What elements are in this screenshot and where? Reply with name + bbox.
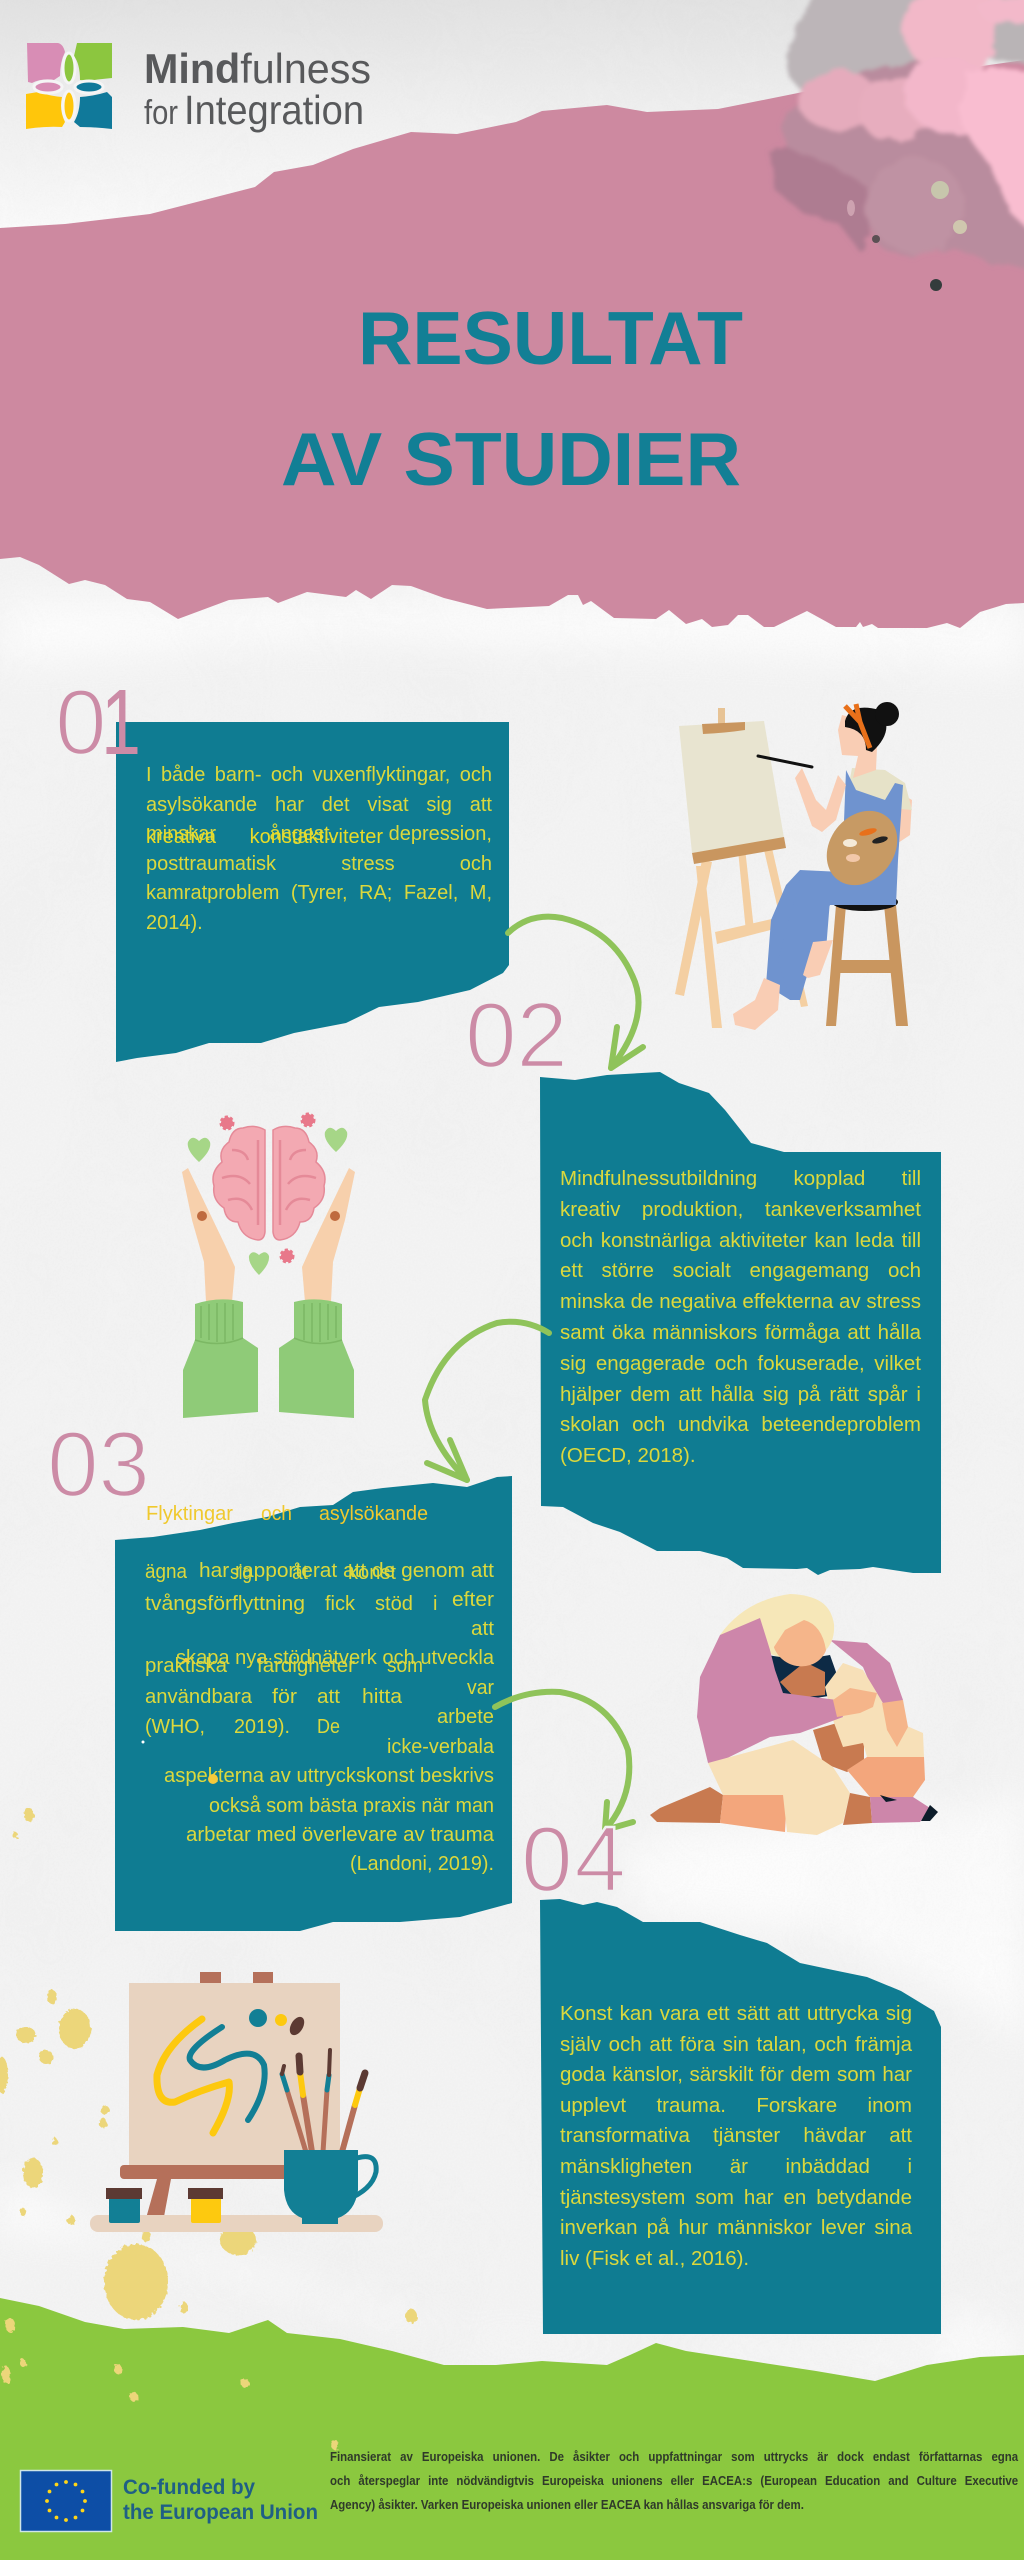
yellow jar bbox=[188, 2188, 223, 2223]
panel 03 bbox=[115, 1476, 512, 1931]
illustration: two people hugging bbox=[650, 1594, 938, 1835]
text block: panel 01 overlapping line: kreativa konstaktiviteter bbox=[146, 826, 383, 848]
child's dark hair bbox=[767, 1655, 836, 1702]
text block: panel 03 overlapped text: sig bbox=[230, 1562, 252, 1584]
base board bbox=[90, 2215, 383, 2232]
panel 02 bbox=[540, 1072, 941, 1575]
adult hands bbox=[833, 1688, 908, 1747]
text block: panel 03 overlapped text: som bbox=[387, 1655, 423, 1677]
text block: panel 03 overlapped text: var bbox=[467, 1677, 494, 1699]
hearts bbox=[188, 1128, 347, 1275]
text block: panel 01 bbox=[146, 764, 492, 934]
text block: panel 04 bbox=[560, 2002, 912, 2270]
logo bbox=[26, 43, 371, 133]
brain right lobe bbox=[273, 1126, 325, 1240]
head and neck bbox=[838, 715, 878, 778]
child's lower leg bbox=[847, 1757, 925, 1797]
number 01: 0 bbox=[55, 670, 107, 774]
text block: panel 03 overlapped text: De bbox=[317, 1716, 340, 1738]
teal paint stroke bbox=[190, 2027, 265, 2120]
text block: panel 04: upplevt trauma. Forskare inom bbox=[560, 2094, 912, 2117]
brain left lobe bbox=[213, 1126, 265, 1240]
text block: panel 03 overlapped text: 2019). bbox=[234, 1716, 290, 1738]
blond hair back bbox=[720, 1594, 834, 1665]
canvas bbox=[129, 1983, 340, 2165]
bandana bbox=[845, 704, 870, 748]
text block: panel 04: transformativa tjänster hävdar att bbox=[560, 2124, 912, 2147]
text block: funding disclaimer: Finansierat av Europeiska unionen. De åsikter och uppfattningar som uttrycks är dock endast författarnas egna bbox=[330, 2449, 1018, 2464]
left hand and sleeve bbox=[182, 1168, 258, 1418]
text block: panel 04: liv (Fisk et al., 2016). bbox=[560, 2247, 749, 2270]
black shoe tips bbox=[880, 1795, 938, 1821]
panel 04 bbox=[540, 1899, 941, 2334]
text block: funding disclaimer: Agency) åsikter. Varken Europeiska unionen eller EACEA kan hållas ansvariga för dem. bbox=[330, 2497, 804, 2512]
teal jar bbox=[106, 2188, 142, 2223]
text block: panel 02: och konstnärliga aktiviteter kan leda till bbox=[560, 1229, 921, 1252]
text block: panel 03 overlapped text: fick bbox=[325, 1593, 356, 1615]
text block: panel 03 overlapped text: asylsökande bbox=[319, 1503, 428, 1525]
text block: panel 01: posttraumatisk stress och bbox=[146, 852, 492, 874]
text block: panel 01: kamratproblem (Tyrer, RA; Fazel, M, bbox=[146, 882, 492, 904]
number 03: 03 bbox=[47, 1412, 150, 1516]
text block: panel 02: kreativ produktion, tankeverksamhet bbox=[560, 1198, 921, 1221]
logo: for bbox=[144, 94, 178, 132]
far arm bbox=[830, 1640, 903, 1707]
text block: panel 02 bbox=[560, 1167, 922, 1467]
arrow 02 to 03 bbox=[425, 1322, 549, 1480]
text block: panel 03 overlapped text: ägna bbox=[145, 1561, 188, 1583]
text block: panel 02: (OECD, 2018). bbox=[560, 1444, 696, 1467]
easel shelf and leg bbox=[120, 2165, 295, 2222]
text block: panel 03 overlapped text: åt bbox=[292, 1562, 308, 1584]
text block: panel 03 overlapped text: skapa nya stödnätverk och utveckla bbox=[176, 1647, 495, 1669]
text block: panel 01: minskar ångest, depression, bbox=[146, 823, 492, 845]
text block: panel 03 overlapped text: också som bästa praxis när man bbox=[209, 1795, 494, 1817]
text block: panel 03 overlapped text: och bbox=[261, 1503, 292, 1525]
text block: panel 03 overlapped text: Flyktingar bbox=[146, 1503, 233, 1525]
number 04: 04 bbox=[521, 1807, 626, 1911]
palette bbox=[812, 797, 912, 899]
text block: panel 04: Konst kan vara ett sätt att uttrycka sig bbox=[560, 2002, 912, 2025]
number 01 bbox=[55, 670, 141, 774]
illustration: brain held by hands bbox=[182, 1114, 355, 1418]
text block: panel 02: minska de negativa effekterna av stress bbox=[560, 1290, 921, 1313]
EU co-funded label: the European Union bbox=[123, 2501, 318, 2524]
arrow 01 to 02 bbox=[508, 917, 643, 1068]
adult's calf bbox=[720, 1795, 787, 1832]
title: RESULTAT bbox=[358, 296, 743, 380]
text block: panel 03 overlapped text: användbara bbox=[145, 1686, 253, 1708]
watercolor splash bbox=[767, 0, 1024, 291]
text block: panel 03 overlapped text bbox=[142, 1503, 495, 1875]
text block: panel 03 overlapped text: att bbox=[471, 1618, 494, 1640]
arrow 03 to 04 bbox=[495, 1692, 633, 1830]
adult's brown foot bbox=[650, 1787, 723, 1823]
text block: panel 03 overlapped text: aspekterna av uttryckskonst beskrivs bbox=[164, 1765, 494, 1787]
illustration: easel with paint and brushes bbox=[90, 1972, 383, 2232]
text block: panel 03 overlapped text: hitta bbox=[362, 1686, 403, 1708]
text block: panel 03 overlapped text: (Landoni, 2019). bbox=[350, 1853, 494, 1875]
hugging person top bbox=[697, 1618, 843, 1765]
text block: panel 01: asylsökande har det visat sig att bbox=[146, 794, 492, 816]
easel bbox=[675, 708, 808, 1028]
painting arm bbox=[795, 768, 846, 832]
text block: panel 04: tjänstesystem som har en betydande bbox=[560, 2186, 912, 2209]
footer green torn band bbox=[0, 2298, 1024, 2560]
text block: panel 03 overlapped text: (WHO, bbox=[145, 1716, 205, 1738]
hair bbox=[845, 708, 886, 752]
title bbox=[281, 296, 743, 501]
brushes bbox=[282, 2050, 365, 2152]
title: AV STUDIER bbox=[281, 417, 741, 501]
text block: panel 02: Mindfulnessutbildning kopplad till bbox=[560, 1167, 921, 1190]
stool bbox=[826, 893, 908, 1026]
text block: panel 02: hjälper dem att hålla sig på rätt spår i bbox=[560, 1383, 921, 1406]
text block: panel 03 overlapped text: färdigheter bbox=[257, 1655, 355, 1677]
text block: panel 03 overlapped text: stöd bbox=[375, 1593, 413, 1615]
EU co-funded label: Co-funded by bbox=[123, 2476, 255, 2499]
text block: panel 02: samt öka människors förmåga att hålla bbox=[560, 1321, 921, 1344]
text block: panel 04: inverkan på hur människor lever sina bbox=[560, 2216, 912, 2239]
illustration: painter at easel bbox=[675, 702, 912, 1030]
text block: panel 01: 2014). bbox=[146, 912, 203, 934]
right arm behind bbox=[885, 790, 912, 845]
text block: panel 02: ett större socialt engagemang och bbox=[560, 1259, 921, 1282]
text block: panel 03 overlapped text: arbete bbox=[437, 1706, 494, 1728]
text block: panel 03 overlapped text: konst bbox=[348, 1562, 396, 1584]
paint dots bbox=[249, 2009, 307, 2038]
text block: panel 04: goda känslor, särskilt för dem som har bbox=[560, 2063, 912, 2086]
text block: panel 04: själv och att föra sin talan, och främja bbox=[560, 2033, 912, 2056]
easel pegs bbox=[200, 1972, 273, 1984]
child's face bbox=[780, 1662, 825, 1698]
text block: panel 04: mänskligheten är inbäddad i bbox=[560, 2155, 912, 2178]
adult's cream pants bbox=[708, 1740, 850, 1835]
child's pink sock bbox=[870, 1797, 930, 1823]
legs skin bbox=[733, 940, 833, 1030]
teal mug bbox=[284, 2150, 376, 2224]
number 02: 02 bbox=[465, 983, 568, 1087]
panel: pink torn header bbox=[0, 60, 1024, 628]
logo wordmark: Mindfulness bbox=[144, 45, 371, 92]
right hand and sleeve bbox=[279, 1168, 355, 1418]
text block: panel 03 overlapped text: praktiska bbox=[145, 1655, 228, 1677]
text block: panel 03 overlapped text: att bbox=[317, 1686, 340, 1708]
flowers bbox=[221, 1114, 314, 1262]
text block: panel 03 overlapped text: arbetar med överlevare av trauma bbox=[186, 1824, 495, 1846]
text block: funding disclaimer: och återspeglar inte nödvändigtvis Europeiska unionens eller EACEA:s (European Education and Culture Executive bbox=[330, 2473, 1018, 2488]
text block: panel 03 overlapped text: i bbox=[433, 1593, 437, 1615]
adult hair front and face bbox=[762, 1596, 836, 1675]
text block: panel 03 overlapped text: efter bbox=[452, 1589, 494, 1611]
brush bbox=[758, 756, 812, 767]
paint splatters bbox=[0, 1808, 417, 2450]
yellow paint stroke bbox=[157, 2019, 229, 2133]
EU co-funded label bbox=[123, 2476, 318, 2524]
text block: panel 02: sig engagerade och fokuserade, vilket bbox=[560, 1352, 921, 1375]
child's brown ankle bbox=[843, 1793, 872, 1825]
overalls torso and legs bbox=[766, 770, 903, 1000]
EU flag bbox=[20, 2470, 112, 2532]
text block: panel 03 overlapped text: tvångsförflyttning bbox=[145, 1593, 305, 1615]
text block: panel 02: skolan och undvika beteendeproblem bbox=[560, 1413, 921, 1436]
text block: panel 03 overlapped text: har rapporterat att de genom att bbox=[199, 1560, 494, 1582]
logo mark bbox=[26, 43, 112, 129]
text block: panel 03 overlapped text: icke-verbala bbox=[387, 1736, 495, 1758]
logo: Integration bbox=[184, 87, 364, 133]
text block: panel 01: I både barn- och vuxenflyktingar, och bbox=[146, 764, 492, 786]
panel 01 bbox=[116, 722, 509, 1062]
text block: panel 03 overlapped text: för bbox=[272, 1686, 297, 1708]
child's brown arm bbox=[813, 1723, 864, 1772]
child's cream knee bbox=[825, 1663, 924, 1757]
text block: funding disclaimer bbox=[330, 2449, 1018, 2512]
shirt bbox=[845, 768, 912, 810]
number 01: 1 bbox=[101, 670, 141, 774]
